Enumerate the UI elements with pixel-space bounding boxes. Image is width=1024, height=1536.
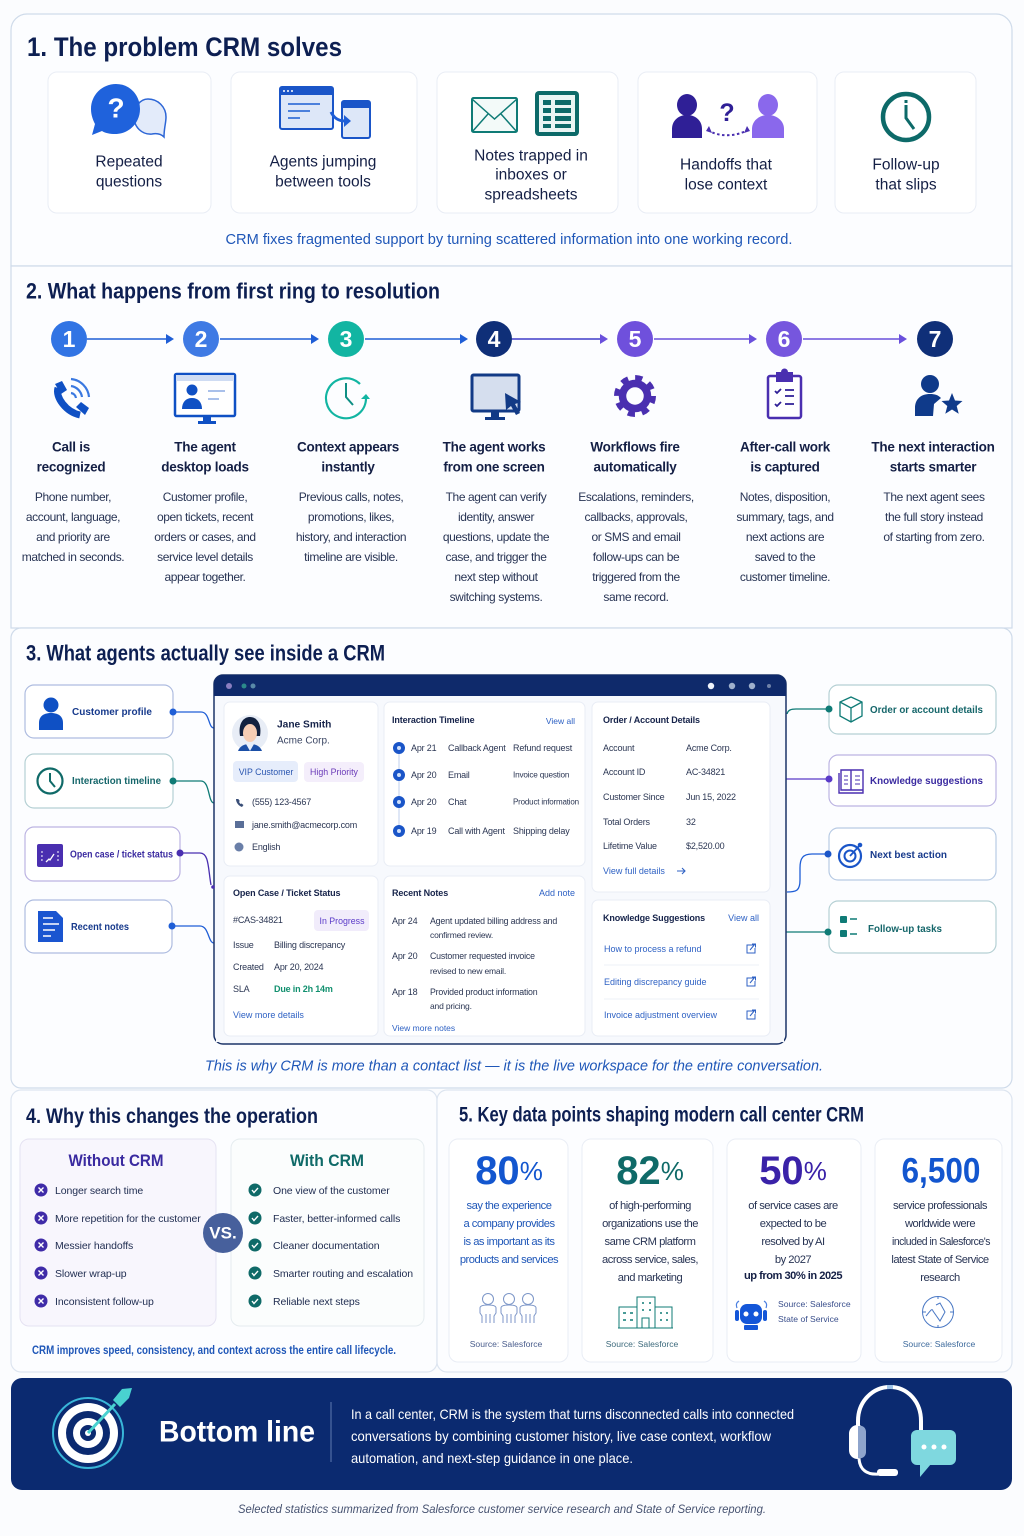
tag: in progress [314, 910, 369, 931]
card: knowledge suggestions [592, 900, 770, 1036]
panel: section 1, the problem CRM solves [11, 14, 1012, 266]
card: order / account details: Account [603, 743, 635, 753]
icon: target with arrow [53, 1388, 132, 1468]
card: knowledge suggestions: How to process a refund [604, 944, 702, 954]
list: with CRM benefits: Reliable next steps [273, 1296, 360, 1308]
step 2: the agent desktop loads: The agent [174, 440, 237, 454]
step 7: next interaction starts smarter: the full story instead [885, 510, 983, 524]
card: interaction timeline: Call with Agent [448, 826, 506, 836]
step 4: the agent works from one screen [443, 321, 550, 604]
callout: next best action [824, 828, 996, 880]
card: recent notes: Apr 24 [392, 916, 418, 926]
heading: section 3: 3. What agents actually see inside a CRM [26, 640, 385, 666]
dashboard window mockup [211, 675, 786, 1044]
stat card: 6,500: latest State of Service [891, 1254, 989, 1266]
card: order / account details: Jun 15, 2022 [686, 792, 736, 802]
step 1: call is recognized: Phone number, [35, 490, 111, 504]
card: agents jumping between tools: Agents jumping [270, 154, 376, 170]
icon: target [839, 843, 862, 867]
stat card: 6,500: included in Salesforce's [892, 1236, 991, 1248]
card: recent notes: confirmed review. [430, 930, 493, 940]
callout: order or account details: Order or account details [870, 704, 983, 716]
stat card: 50%: of service cases are [748, 1200, 838, 1212]
stat card: 82%: same CRM platform [605, 1236, 696, 1248]
list: with CRM benefits: One view of the customer [273, 1185, 390, 1197]
connectors: left and right callouts to dashboard [172, 709, 829, 943]
card: recent notes: Provided product information [430, 987, 538, 997]
icon: agent desktop [175, 374, 235, 424]
tag: VIP customer: VIP Customer [239, 767, 293, 777]
stat card: 80%: say the experience [467, 1200, 552, 1212]
icon: avatar [232, 715, 268, 751]
stat card: 80%: is as important as its [464, 1236, 555, 1248]
card: recent notes: Agent updated billing address and [430, 916, 557, 926]
process arrows [87, 334, 907, 344]
step 6: after-call work is captured: Notes, disposition, [740, 490, 830, 504]
icon: person [39, 698, 63, 730]
step 1: call is recognized: account, language, [26, 510, 120, 524]
card: notes trapped in inboxes: Notes trapped in [474, 148, 588, 164]
card: order / account details [592, 702, 770, 892]
icon: office buildings [618, 1297, 673, 1328]
step 7: next interaction starts smarter: of starting from zero. [883, 530, 985, 544]
step 7: next interaction starts smarter: The next agent sees [883, 490, 985, 504]
step 5: workflows fire automatically: same record. [603, 590, 669, 604]
stat card: 50%: by 2027 [775, 1254, 811, 1266]
card: open case / ticket status: Created [233, 962, 264, 972]
icon: two application windows [280, 87, 370, 138]
step 6: after-call work is captured: customer timeline. [740, 570, 830, 584]
step 3: context appears instantly: history, and interaction [296, 530, 406, 544]
stat card: 82%: across service, sales, [602, 1254, 698, 1266]
card: order / account details: AC-34821 [686, 767, 725, 777]
card: order / account details: Account ID [603, 767, 646, 777]
card: follow-up that slips: that slips [875, 176, 937, 194]
stat card: 50% [727, 1139, 861, 1362]
tag: high priority [304, 762, 364, 782]
callout: knowledge suggestions: Knowledge suggestions [870, 775, 983, 787]
stat card: 6,500: research [920, 1272, 960, 1284]
stat card: 6,500: worldwide were [904, 1218, 975, 1230]
heading: section 5: 5. Key data points shaping modern call center CRM [459, 1104, 864, 1126]
card: knowledge suggestions: View all [728, 913, 759, 923]
icon: chat bubbles [91, 84, 166, 137]
icon: three people [480, 1294, 536, 1323]
step 4: the agent works from one screen: 4 [488, 326, 501, 352]
card: open case / ticket status: View more details [233, 1010, 304, 1020]
list: with CRM benefits [248, 1184, 413, 1308]
step 1: call is recognized [22, 321, 124, 564]
card: recent notes: View more notes [392, 1023, 455, 1033]
tag: in progress: In Progress [320, 916, 365, 926]
step 7: next interaction starts smarter [871, 321, 995, 544]
step 4: the agent works from one screen: case, and trigger the [445, 550, 547, 564]
stat card: 82%: Source: Salesforce [606, 1339, 679, 1349]
card: knowledge suggestions: Knowledge Suggestions [603, 913, 705, 923]
icon: robot [735, 1301, 767, 1330]
icon: clock with arrow [326, 378, 370, 418]
card: notes trapped in inboxes: inboxes or [495, 166, 567, 184]
card: order / account details: View full details [603, 866, 665, 876]
stat card: 80%: a company provides [463, 1218, 555, 1230]
card: recent notes: Customer requested invoice [430, 951, 535, 961]
icon: box [840, 697, 862, 722]
card: follow-up that slips [835, 72, 976, 213]
card: interaction timeline: Refund request [513, 743, 573, 753]
card: interaction timeline: Chat [448, 797, 467, 807]
callout: knowledge suggestions [768, 755, 996, 806]
stat card: 50%: State of Service [778, 1314, 839, 1324]
heading: section 2: 2. What happens from first ring to resolution [26, 278, 440, 304]
card: interaction timeline: Apr 20 [411, 797, 437, 807]
icon: gear [617, 378, 653, 414]
list: with CRM benefits: Smarter routing and escalation [273, 1268, 413, 1280]
stat card: 80%: products and services [460, 1254, 559, 1266]
step 2: the agent desktop loads: appear together. [164, 570, 246, 584]
icon: headset with chat bubble [849, 1387, 956, 1477]
card: order / account details: $2,520.00 [686, 841, 725, 851]
card: interaction timeline: Apr 20 [411, 770, 437, 780]
card: knowledge suggestions: Invoice adjustment overview [604, 1010, 718, 1020]
stat card: 50%: expected to be [760, 1218, 826, 1230]
card: recent notes: revised to new email. [430, 966, 506, 976]
card: open case / ticket status: Open Case / Ticket Status [233, 888, 340, 898]
stat card: 82%: 82% [616, 1149, 684, 1193]
card: interaction timeline: Apr 21 [411, 743, 437, 753]
stat card: 6,500: Source: Salesforce [903, 1339, 976, 1349]
card: interaction timeline: Shipping delay [513, 826, 570, 836]
card: order / account details: Acme Corp. [686, 743, 732, 753]
card: interaction timeline: Apr 19 [411, 826, 437, 836]
step 3: context appears instantly: promotions, likes, [308, 510, 394, 524]
card: without CRM: Without CRM [68, 1152, 164, 1170]
card: recent notes: and pricing. [430, 1001, 472, 1011]
step 5: workflows fire automatically: triggered from the [592, 570, 680, 584]
callout: follow-up tasks [768, 901, 996, 953]
card: repeated questions: questions [96, 174, 162, 190]
card: customer profile: English [252, 842, 280, 852]
card: order / account details: Customer Since [603, 792, 665, 802]
step 3: context appears instantly: Previous calls, notes, [299, 490, 403, 504]
step 4: the agent works from one screen: The agent can verify [446, 490, 547, 504]
text block: bottom line statement: conversations by combining customer history, live case context, workflow [351, 1428, 772, 1444]
card: open case / ticket status: SLA [233, 984, 250, 994]
step 5: workflows fire automatically: 5 [629, 326, 642, 352]
card: open case / ticket status: Billing discrepancy [274, 940, 346, 950]
step 1: call is recognized: and priority are [36, 530, 111, 544]
card: follow-up that slips: Follow-up [872, 156, 940, 174]
icon: clock [38, 768, 62, 794]
icon: phone [55, 379, 89, 415]
callout: next best action: Next best action [870, 849, 947, 861]
icon: globe with badge [922, 1296, 954, 1328]
step 6: after-call work is captured: is captured [750, 460, 820, 474]
list: without CRM problems: Inconsistent follow-up [55, 1296, 154, 1308]
step 4: the agent works from one screen: next step without [454, 570, 539, 584]
card: repeated questions [48, 72, 211, 213]
badge: VS: VS. [209, 1224, 237, 1242]
step 4: the agent works from one screen: from one screen [443, 460, 545, 474]
icon: two people with question mark [672, 94, 784, 138]
stat card: 82%: and marketing [618, 1272, 682, 1284]
card: notes trapped in inboxes: spreadsheets [484, 186, 578, 204]
step 2: the agent desktop loads: desktop loads [161, 460, 249, 474]
step 6: after-call work is captured: summary, tags, and [736, 510, 834, 524]
step 2: the agent desktop loads: service level details [157, 550, 253, 564]
card: customer profile: Acme Corp. [277, 736, 330, 746]
icon: open book [839, 770, 863, 793]
list: without CRM problems [34, 1184, 201, 1308]
step 5: workflows fire automatically [578, 321, 694, 604]
icon: envelope [472, 98, 517, 132]
step 2: the agent desktop loads: Customer profile, [163, 490, 247, 504]
card: interaction timeline: Product information [513, 798, 579, 806]
stat card: 82%: organizations use the [602, 1218, 698, 1230]
footer: source note: Selected statistics summarized from Salesforce customer service research and State of Service reporting. [238, 1504, 766, 1516]
step 4: the agent works from one screen: switching systems. [450, 590, 542, 604]
card: customer profile: jane.smith@acmecorp.com [251, 820, 357, 830]
stat card: 82%: of high-performing [609, 1200, 691, 1212]
stat card: 50%: Source: Salesforce [778, 1299, 851, 1309]
icon: person with star [915, 375, 962, 416]
text block: bottom line statement: In a call center, CRM is the system that turns disconnected calls into connected [351, 1406, 794, 1422]
icon: document [38, 911, 63, 942]
card: order / account details: Total Orders [603, 817, 651, 827]
stat card: 50%: resolved by AI [761, 1236, 825, 1248]
card: customer profile: Jane Smith [277, 720, 331, 730]
card: agents jumping between tools: between tools [275, 174, 371, 190]
heading: section 4: 4. Why this changes the operation [26, 1104, 318, 1128]
callout: interaction timeline [25, 754, 176, 808]
card: with CRM: With CRM [290, 1152, 364, 1170]
step 4: the agent works from one screen: identity, answer [458, 510, 534, 524]
heading: bottom line: Bottom line [159, 1416, 315, 1448]
card: customer profile: (555) 123-4567 [252, 797, 311, 807]
card: interaction timeline: Callback Agent [448, 743, 506, 753]
step 5: workflows fire automatically: Workflows fire [590, 440, 680, 454]
stat card: 80%: 80% [475, 1149, 543, 1193]
step 1: call is recognized: recognized [37, 460, 105, 474]
step 4: the agent works from one screen: The agent works [443, 440, 545, 454]
card: interaction timeline: Email [448, 770, 470, 780]
panel: section 4, why this changes the operation [11, 1090, 437, 1372]
step 3: context appears instantly: 3 [340, 326, 352, 352]
card: order / account details: Order / Account Details [603, 715, 700, 725]
tag: high priority: High Priority [310, 767, 359, 777]
icon: clock [883, 94, 929, 140]
badge: VS [203, 1213, 243, 1253]
card: open case / ticket status: Due in 2h 14m [274, 984, 333, 994]
icon: chat bubbles: ? [107, 92, 125, 124]
tag: VIP customer [233, 761, 298, 782]
card: open case / ticket status: Apr 20, 2024 [274, 962, 324, 972]
step 3: context appears instantly: Context appears [297, 440, 399, 454]
step 5: workflows fire automatically: or SMS and email [592, 530, 680, 544]
step 3: context appears instantly [296, 321, 406, 564]
step 2: the agent desktop loads [154, 321, 256, 584]
list: without CRM problems: Slower wrap-up [55, 1268, 127, 1280]
stat card: 82% [582, 1139, 713, 1362]
card: recent notes: Apr 18 [392, 987, 418, 997]
step 7: next interaction starts smarter: The next interaction [871, 440, 995, 454]
card: customer profile [224, 702, 378, 866]
icon: two people with question mark: ? [719, 99, 735, 127]
step 3: context appears instantly: timeline are visible. [304, 550, 398, 564]
callout: CRM fixes fragmented support: CRM fixes fragmented support by turning scattered information into one working record. [226, 232, 792, 248]
card: recent notes: Add note [539, 888, 575, 898]
callout: interaction timeline: Interaction timeline [72, 775, 161, 787]
step 6: after-call work is captured: saved to the [755, 550, 816, 564]
callout: customer profile [25, 685, 176, 738]
icon: ticket [37, 844, 63, 867]
card: notes trapped in inboxes [437, 72, 618, 213]
card: interaction timeline: Invoice question [513, 770, 570, 780]
card: open case / ticket status: #CAS-34821 [233, 915, 283, 925]
window chrome dots [226, 683, 771, 689]
card: handoffs that lose context [638, 72, 817, 213]
step 3: context appears instantly: instantly [321, 460, 375, 474]
card: handoffs that lose context: Handoffs that [680, 156, 773, 174]
callout: open case / ticket status: Open case / ticket status [70, 850, 173, 860]
heading: section 1: 1. The problem CRM solves [27, 32, 342, 62]
stat card: 6,500: service professionals [893, 1200, 988, 1212]
step 7: next interaction starts smarter: starts smarter [890, 460, 977, 474]
text block: bottom line statement [351, 1406, 794, 1466]
card: order / account details: Lifetime Value [603, 841, 657, 851]
step 4: the agent works from one screen: questions, update the [443, 530, 550, 544]
callout: order or account details [826, 685, 996, 734]
banner: bottom line [11, 1378, 1012, 1490]
card: interaction timeline [384, 702, 585, 866]
stat card: 6,500: 6,500 [902, 1152, 980, 1190]
step 5: workflows fire automatically: follow-ups can be [593, 550, 680, 564]
card: recent notes: Recent Notes [392, 888, 448, 898]
step 2: the agent desktop loads: 2 [195, 326, 207, 352]
icon: clipboard checklist [768, 369, 801, 418]
stat card: 50%: up from 30% in 2025 [744, 1270, 842, 1282]
callout: open case / ticket status [25, 827, 184, 881]
callout: CRM improves speed: CRM improves speed, consistency, and context across the entire call lifecycle. [32, 1345, 396, 1357]
callout: follow-up tasks: Follow-up tasks [868, 923, 942, 935]
callout: customer profile: Customer profile [72, 706, 152, 718]
card: interaction timeline: Interaction Timeline [392, 715, 475, 725]
step 5: workflows fire automatically: Escalations, reminders, [578, 490, 694, 504]
icon: monitor with cursor [472, 375, 521, 420]
step 6: after-call work is captured: After-call work [740, 440, 831, 454]
card: repeated questions: Repeated [95, 154, 163, 170]
card: agents jumping between tools [231, 72, 417, 213]
step 1: call is recognized: 1 [63, 326, 76, 352]
panel: section 2, first ring to resolution [11, 266, 1012, 628]
stat card: 6,500 [875, 1139, 1002, 1362]
list: without CRM problems: Longer search time [55, 1185, 143, 1197]
card: recent notes: Apr 20 [392, 951, 418, 961]
callout: more than a contact list: This is why CRM is more than a contact list — it is the live workspace for the entire conversation. [205, 1058, 823, 1074]
icon: spreadsheet [535, 91, 579, 136]
step 6: after-call work is captured: next actions are [746, 530, 825, 544]
text block: bottom line statement: automation, and next-step guidance in one place. [351, 1450, 633, 1466]
card: without CRM [20, 1139, 216, 1326]
step 1: call is recognized: matched in seconds. [22, 550, 124, 564]
stat card: 80%: Source: Salesforce [470, 1339, 543, 1349]
panel: section 5, key data points [437, 1090, 1012, 1372]
card: with CRM [231, 1139, 424, 1326]
panel: section 3, what agents see inside a CRM [11, 628, 1012, 1088]
step 2: the agent desktop loads: open tickets, recent [157, 510, 254, 524]
card: interaction timeline: View all [546, 716, 575, 726]
list: with CRM benefits: Cleaner documentation [273, 1240, 380, 1252]
callout: recent notes [25, 900, 176, 953]
step 1: call is recognized: Call is [52, 440, 90, 454]
step 6: after-call work is captured: 6 [778, 326, 790, 352]
step 5: workflows fire automatically: callbacks, approvals, [584, 510, 688, 524]
list: without CRM problems: More repetition for the customer [55, 1213, 201, 1225]
callout: recent notes: Recent notes [71, 921, 129, 933]
stat card: 50%: 50% [759, 1149, 827, 1193]
list: with CRM benefits: Faster, better-informed calls [273, 1213, 400, 1225]
list: without CRM problems: Messier handoffs [55, 1240, 133, 1252]
step 5: workflows fire automatically: automatically [593, 460, 677, 474]
step 2: the agent desktop loads: orders or cases, and [154, 530, 256, 544]
card: open case / ticket status: Issue [233, 940, 254, 950]
stat card: 80% [449, 1139, 568, 1362]
step 7: next interaction starts smarter: 7 [929, 326, 941, 352]
card: handoffs that lose context: lose context [685, 176, 768, 194]
icon: task list [840, 916, 857, 937]
card: open case / ticket status [224, 876, 378, 1036]
card: recent notes [384, 876, 585, 1036]
step 6: after-call work is captured [736, 321, 834, 584]
card: order / account details: 32 [686, 817, 696, 827]
card: knowledge suggestions: Editing discrepancy guide [604, 977, 707, 987]
